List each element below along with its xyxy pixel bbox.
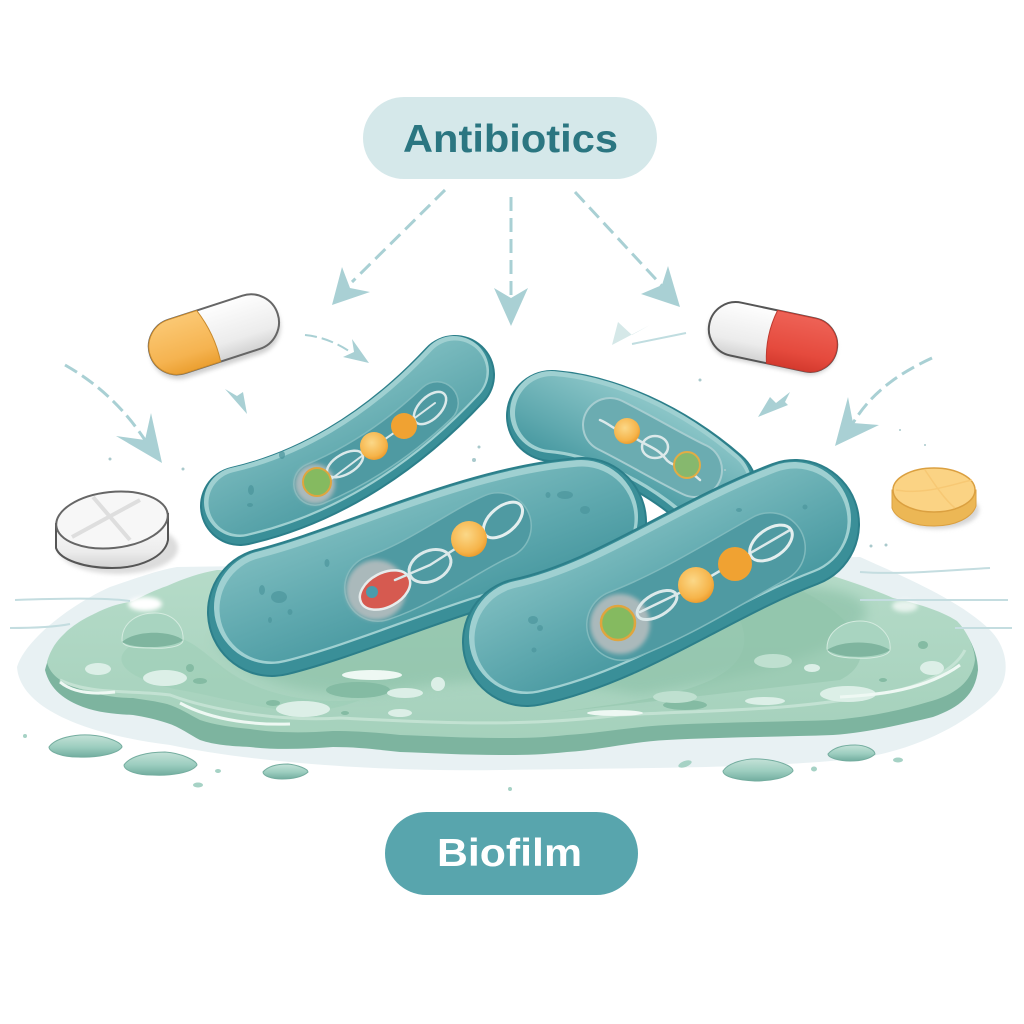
bacterium capsule: center — [346, 495, 529, 620]
bacterium: back right — [551, 412, 712, 490]
bacterium: center large — [259, 491, 590, 623]
arrow: from antibiotics right — [575, 192, 680, 307]
label: Antibiotics: Antibiotics — [403, 118, 618, 161]
pill: white tablet — [53, 486, 178, 574]
arrow: far left curved — [65, 365, 162, 463]
arrow: from antibiotics left — [332, 190, 445, 305]
specks — [108, 378, 926, 548]
label: Antibiotics — [363, 97, 657, 179]
biofilm bubble: left — [122, 613, 183, 648]
pill: orange and white capsule — [142, 287, 288, 386]
bacterium capsule: upper left — [295, 386, 452, 504]
pill: red and white capsule — [703, 297, 842, 380]
biofilm puddle — [10, 557, 1012, 770]
droplets — [23, 734, 903, 791]
bacterium: front right — [526, 504, 808, 654]
bacterium capsule: back right — [599, 419, 601, 421]
label: Biofilm — [385, 812, 638, 895]
pill: gold tablet — [892, 468, 979, 529]
biofilm bubble: right — [827, 621, 890, 658]
arrow: from antibiotics center — [494, 197, 528, 326]
bacterium: upper left — [239, 371, 455, 507]
small arrows — [225, 322, 790, 417]
bacterium capsule: front right — [590, 518, 799, 654]
label: Biofilm: Biofilm — [437, 832, 582, 875]
arrow: far right curved — [835, 358, 932, 446]
